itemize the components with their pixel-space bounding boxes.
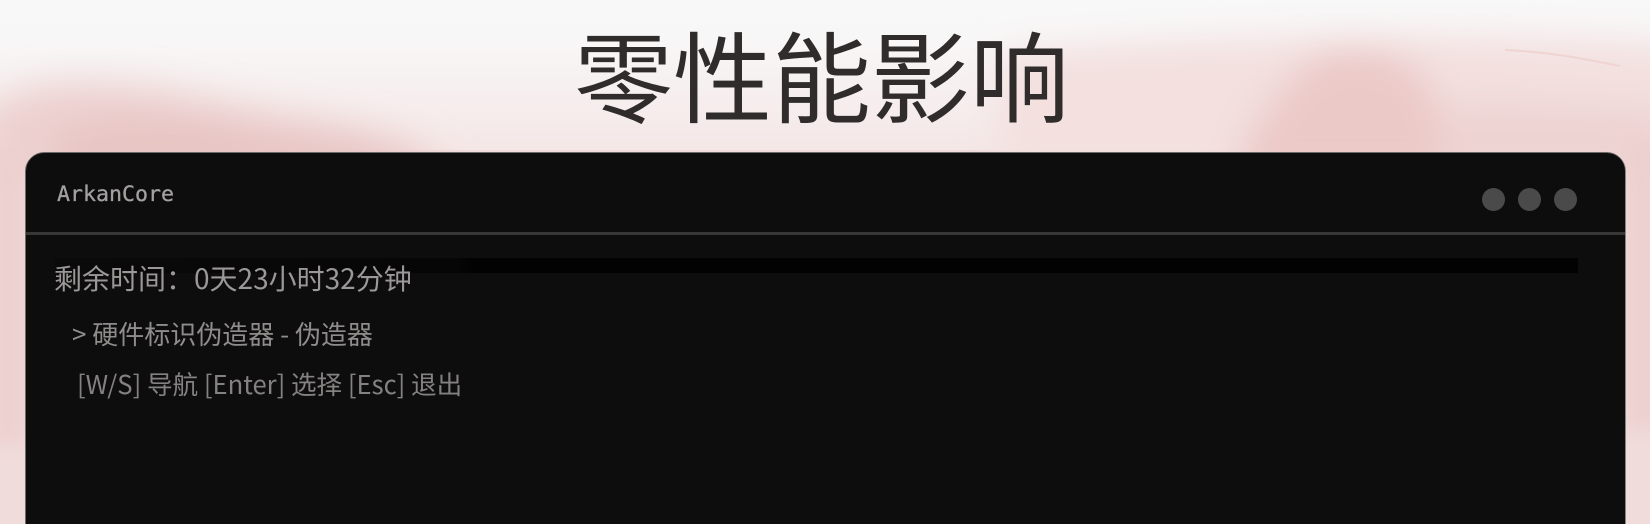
key hints: [W/S] 导航 [Enter] 选择 [Esc] 退出 — [77, 365, 462, 402]
title: 零性能影响 — [574, 0, 1069, 144]
window control buttons — [1482, 188, 1577, 211]
window app name: ArkanCore — [57, 182, 174, 207]
countdown text: 剩余时间：0天23小时32分钟 — [54, 258, 412, 298]
menu item: > 硬件标识伪造器 - 伪造器 — [72, 315, 373, 352]
panel: terminal window — [26, 153, 1625, 524]
